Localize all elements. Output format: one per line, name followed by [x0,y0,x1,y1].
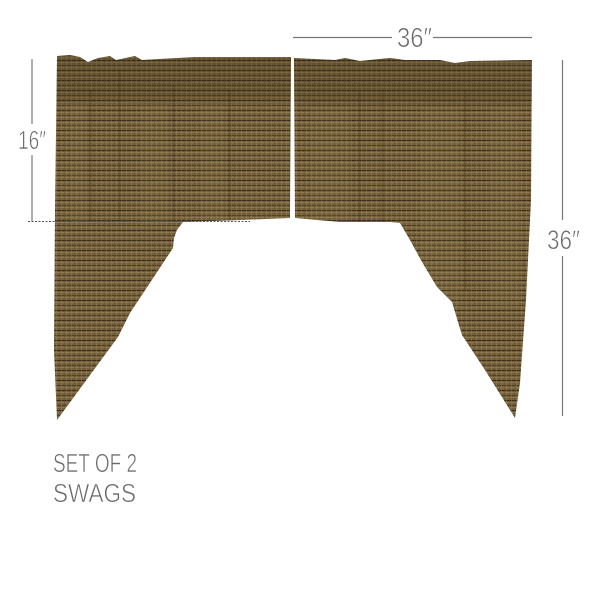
left curtain panel [50,50,295,425]
caption: set of 2 swags: SWAGS [53,478,136,508]
dimension: 36 inch width: 36″ [397,22,432,53]
caption: set of 2 swags [53,448,137,508]
dimension: 16 inch drop: 16″ [18,125,46,155]
caption: set of 2 swags: SET OF 2 [53,448,137,478]
right curtain panel [290,50,535,425]
dimension: 36 inch length: 36″ [547,225,580,255]
